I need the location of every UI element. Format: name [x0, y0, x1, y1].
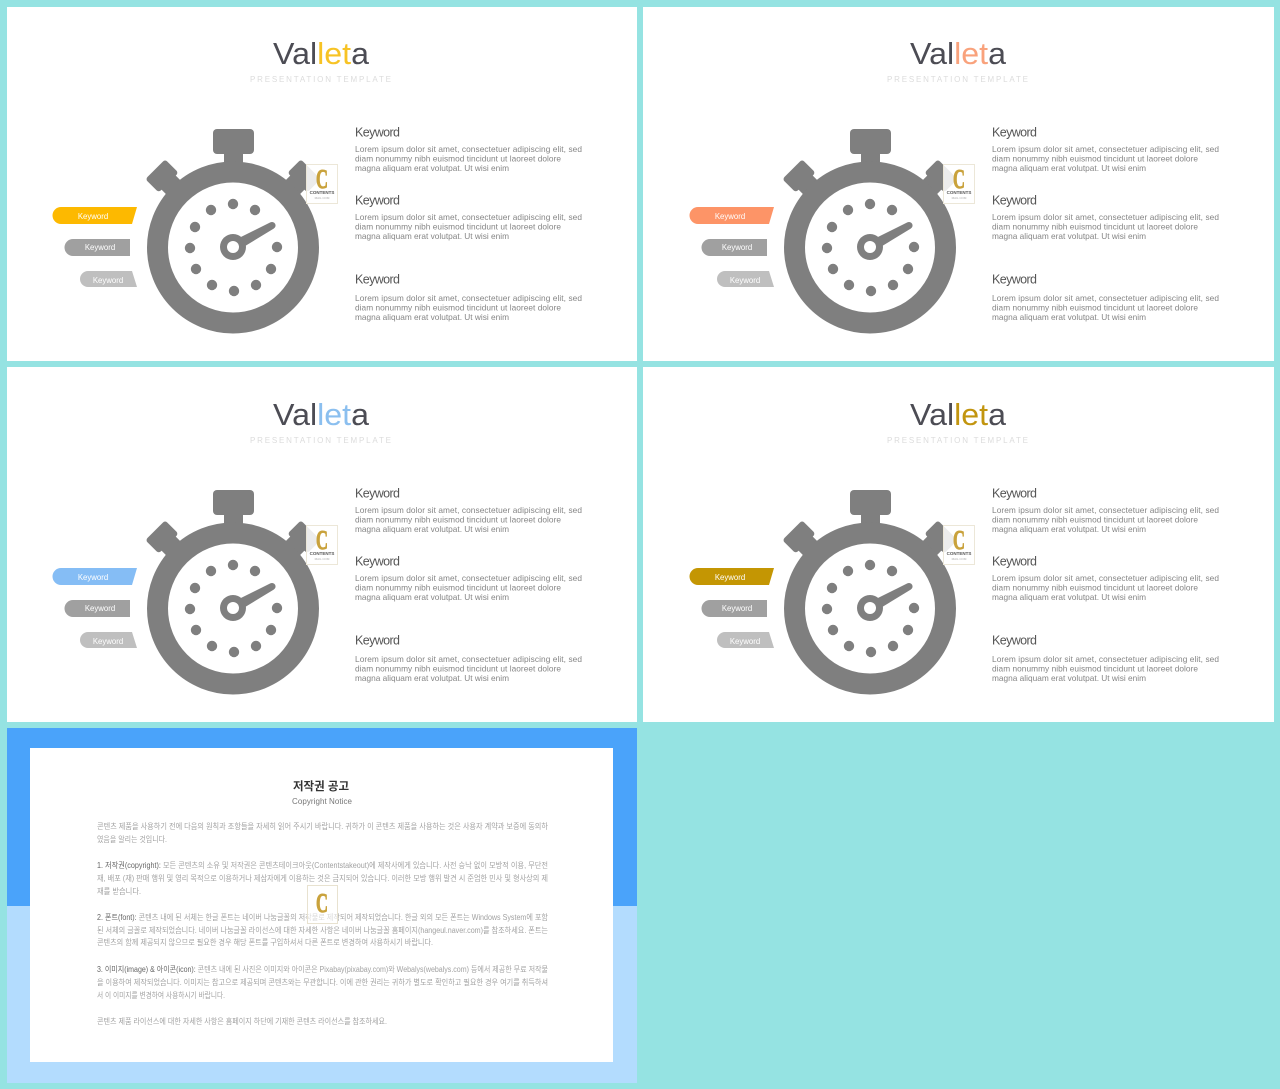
text block 1: magna aliquam erat volutpat. Ut wisi enim — [355, 163, 509, 173]
text block 2: diam nonummy nibh euismod tincidunt ut laoreet dolore — [355, 582, 561, 592]
section 2: font — [97, 912, 549, 947]
notice subheading: Copyright Notice — [292, 797, 353, 806]
tag: active keyword — [690, 568, 774, 585]
tag: second keyword — [64, 239, 130, 256]
watermark logo — [306, 164, 338, 204]
tag: third keyword: Keyword — [730, 637, 760, 646]
tag: third keyword — [717, 632, 774, 648]
watermark logo: C — [953, 525, 965, 555]
text block 3: magna aliquam erat volutpat. Ut wisi enim — [992, 673, 1146, 683]
text block 2: diam nonummy nibh euismod tincidunt ut laoreet dolore — [355, 222, 561, 232]
text block 3: diam nonummy nibh euismod tincidunt ut laoreet dolore — [992, 664, 1198, 674]
text block 1: Keyword — [992, 486, 1037, 500]
text block 1 — [355, 126, 582, 173]
icon: stopwatch — [782, 490, 958, 684]
text block 2: Keyword — [355, 554, 400, 568]
watermark logo — [306, 525, 338, 564]
intro paragraph: 콘텐츠 제품을 사용하기 전에 다음의 원칙과 조항들을 자세히 읽어 주시기 바랍니다. 귀하가 이 콘텐츠 제품을 사용하는 것은 사용자 계약과 보증에 동의하 — [97, 821, 549, 831]
text block 1: Lorem ipsum dolor sit amet, consectetuer adipiscing elit, sed — [992, 144, 1219, 154]
notice heading: 저작권 공고 — [293, 779, 349, 793]
text block 2: Lorem ipsum dolor sit amet, consectetuer adipiscing elit, sed — [355, 573, 582, 583]
section 3: image and icon — [97, 964, 548, 1000]
tag: third keyword: Keyword — [93, 637, 123, 646]
text block 3 — [992, 634, 1219, 683]
watermark logo: MAIL COM — [952, 557, 967, 561]
text block 2: magna aliquam erat volutpat. Ut wisi enim — [355, 231, 509, 241]
text block 1: Lorem ipsum dolor sit amet, consectetuer adipiscing elit, sed — [355, 505, 582, 515]
tag: second keyword: Keyword — [85, 243, 115, 252]
section 1: copyright — [97, 860, 548, 896]
title: Valleta — [273, 397, 370, 432]
text block 2: Keyword — [992, 194, 1037, 208]
panel: orange slide — [643, 7, 1274, 361]
text block 1: Keyword — [992, 126, 1037, 140]
tag: second keyword — [702, 600, 767, 617]
text block 2: diam nonummy nibh euismod tincidunt ut laoreet dolore — [992, 582, 1198, 592]
section 1: copyright: 1. 저작권(copyright): 모든 콘텐츠의 소유 및 저작권은 콘텐츠테이크아웃(Contentstakeout)에 제작사에게 있습니다. 사전 승낙 없이 모방적 이용, 무단전 — [97, 860, 548, 870]
text block 3: diam nonummy nibh euismod tincidunt ut laoreet dolore — [355, 302, 561, 312]
blue upper background — [7, 728, 637, 906]
text block 3: Keyword — [992, 272, 1037, 286]
text block 3: Lorem ipsum dolor sit amet, consectetuer adipiscing elit, sed — [992, 654, 1219, 664]
text block 1 — [992, 486, 1219, 534]
text block 3: magna aliquam erat volutpat. Ut wisi enim — [992, 312, 1146, 322]
panel: copyright notice — [7, 728, 637, 1083]
watermark logo: C — [316, 525, 328, 555]
watermark logo — [308, 886, 338, 924]
text block 2: Lorem ipsum dolor sit amet, consectetuer adipiscing elit, sed — [992, 212, 1219, 222]
watermark logo — [944, 164, 974, 204]
watermark logo: MAIL COM — [952, 196, 967, 200]
text block 2 — [355, 194, 582, 241]
text block 1 — [355, 486, 582, 534]
text block 3 — [992, 272, 1219, 322]
section 3: image and icon: 을 이용하여 제작되었습니다. 이미지는 참고으로 제공되며 콘텐츠와는 무관합니다. 이에 관한 권리는 귀하가 별도로 확인하고 필요한 경우 여기를 취득하셔 — [97, 977, 548, 987]
tag: second keyword: Keyword — [722, 604, 752, 613]
text block 2: Keyword — [992, 554, 1037, 568]
watermark logo — [944, 525, 974, 564]
slide background — [643, 367, 1274, 722]
tag: third keyword: Keyword — [730, 276, 760, 285]
text block 2: Lorem ipsum dolor sit amet, consectetuer adipiscing elit, sed — [355, 212, 582, 222]
slide background — [7, 367, 637, 722]
section 2: font: 된 서체의 글꼴로 제작되었습니다. 네이버 나눔글꼴 라이선스에 대한 자세한 사항은 네이버 나눔글꼴 홈페이지(hangeul.naver.com)를 참조하세요. 폰트는 — [97, 925, 548, 935]
text block 3: Lorem ipsum dolor sit amet, consectetuer adipiscing elit, sed — [355, 293, 582, 303]
text block 3: Keyword — [355, 272, 400, 286]
subtitle: PRESENTATION TEMPLATE — [887, 75, 1028, 84]
intro paragraph — [97, 821, 549, 844]
white notice card — [30, 748, 613, 1062]
title: Valleta — [910, 36, 1007, 71]
text block 2: magna aliquam erat volutpat. Ut wisi enim — [992, 231, 1146, 241]
tag: active keyword: Keyword — [715, 573, 745, 582]
tag: active keyword — [690, 207, 774, 224]
text block 3 — [355, 272, 582, 322]
watermark logo: MAIL COM — [315, 196, 330, 200]
watermark logo: C — [953, 164, 965, 194]
text block 3: Keyword — [992, 634, 1037, 648]
tag: active keyword: Keyword — [78, 212, 108, 221]
text block 1: Keyword — [355, 126, 400, 140]
title: Valleta — [273, 36, 370, 71]
text block 3: diam nonummy nibh euismod tincidunt ut laoreet dolore — [992, 302, 1198, 312]
text block 2: Lorem ipsum dolor sit amet, consectetuer adipiscing elit, sed — [992, 573, 1219, 583]
panel: yellow slide — [7, 7, 637, 361]
icon: stopwatch — [145, 490, 321, 684]
text block 2: magna aliquam erat volutpat. Ut wisi enim — [992, 592, 1146, 602]
slide background — [7, 7, 637, 361]
section 2: font: 콘텐츠의 함께 제공되지 않으므로 필요한 경우 해당 폰트를 구입하셔서 다른 폰트로 변경하여 사용하시기 바랍니다. — [97, 937, 433, 947]
text block 3: Lorem ipsum dolor sit amet, consectetuer adipiscing elit, sed — [355, 654, 582, 664]
text block 2 — [355, 554, 582, 602]
tag: second keyword: Keyword — [722, 243, 752, 252]
tag: third keyword: Keyword — [93, 276, 123, 285]
subtitle: PRESENTATION TEMPLATE — [250, 436, 391, 445]
text block 1: diam nonummy nibh euismod tincidunt ut laoreet dolore — [992, 154, 1198, 164]
slide background — [643, 7, 1274, 361]
closing line: 콘텐츠 제품 라이선스에 대한 자세한 사항은 홈페이지 하단에 기재한 콘텐츠 라이선스를 참조하세요. — [97, 1016, 387, 1026]
section 1: copyright: 재를 받습니다. — [97, 886, 141, 896]
tag: third keyword — [80, 271, 137, 287]
text block 1: Lorem ipsum dolor sit amet, consectetuer adipiscing elit, sed — [355, 144, 582, 154]
text block 1: diam nonummy nibh euismod tincidunt ut laoreet dolore — [355, 154, 561, 164]
text block 3: magna aliquam erat volutpat. Ut wisi enim — [355, 312, 509, 322]
subtitle: PRESENTATION TEMPLATE — [250, 75, 391, 84]
text block 3: Lorem ipsum dolor sit amet, consectetuer adipiscing elit, sed — [992, 293, 1219, 303]
subtitle: PRESENTATION TEMPLATE — [887, 436, 1028, 445]
section 3: image and icon: 서 이 이미지를 변경하여 사용하시기 바랍니다. — [97, 990, 225, 1000]
tag: third keyword — [717, 271, 774, 287]
section 1: copyright: 재, 배포 (재) 판매 행위 및 영리 목적으로 이용하거나 제삼자에게 이용하는 것은 금지되어 있습니다. 이러한 모방 행위 발견 시 준엄한 민사 및 형사상의 제 — [97, 873, 548, 883]
watermark logo: CONTENTS — [310, 190, 334, 195]
text block 3: diam nonummy nibh euismod tincidunt ut laoreet dolore — [355, 664, 561, 674]
text block 1: Keyword — [355, 486, 400, 500]
section 3: image and icon: 3. 이미지(image) & 아이콘(icon): 콘텐츠 내에 된 사진은 이미지와 아이콘은 Pixabay(pixabay.com)와 Webalys(webalys.com) 등에서 제공한 무료 저작물 — [97, 964, 548, 974]
text block 1 — [992, 126, 1219, 173]
tag: second keyword — [702, 239, 767, 256]
panel: gold slide — [643, 367, 1274, 722]
text block 1: Lorem ipsum dolor sit amet, consectetuer adipiscing elit, sed — [992, 505, 1219, 515]
title: Valleta — [910, 397, 1007, 432]
text block 1: diam nonummy nibh euismod tincidunt ut laoreet dolore — [355, 514, 561, 524]
tag: active keyword — [52, 207, 137, 224]
text block 2: magna aliquam erat volutpat. Ut wisi enim — [355, 592, 509, 602]
text block 2 — [992, 554, 1219, 602]
text block 2: Keyword — [355, 194, 400, 208]
section 2: font: 2. 폰트(font): 콘텐츠 내에 된 서체는 한글 폰트는 네이버 나눔글꼴의 저작물로 제작되어 제작되었습니다. 한글 외의 모든 폰트는 Windows System에 포함 — [97, 912, 549, 922]
watermark logo: C — [316, 888, 328, 918]
panel: blue slide — [7, 367, 637, 722]
text block 3: Keyword — [355, 634, 400, 648]
text block 1: magna aliquam erat volutpat. Ut wisi enim — [992, 524, 1146, 534]
light blue lower background — [7, 906, 637, 1083]
tag: third keyword — [80, 632, 137, 648]
text block 1: magna aliquam erat volutpat. Ut wisi enim — [355, 524, 509, 534]
watermark logo: CONTENTS — [310, 551, 334, 556]
watermark logo: CONTENTS — [947, 190, 971, 195]
text block 2 — [992, 194, 1219, 241]
watermark logo: CONTENTS — [947, 551, 971, 556]
tag: second keyword: Keyword — [85, 604, 115, 613]
tag: second keyword — [64, 600, 130, 617]
text block 1: diam nonummy nibh euismod tincidunt ut laoreet dolore — [992, 514, 1198, 524]
text block 3 — [355, 634, 582, 683]
text block 2: diam nonummy nibh euismod tincidunt ut laoreet dolore — [992, 222, 1198, 232]
text block 1: magna aliquam erat volutpat. Ut wisi enim — [992, 163, 1146, 173]
icon: stopwatch — [782, 129, 958, 323]
watermark logo: MAIL COM — [315, 557, 330, 561]
tag: active keyword — [52, 568, 137, 585]
watermark logo: C — [316, 164, 328, 194]
tag: active keyword: Keyword — [78, 573, 108, 582]
icon: stopwatch — [145, 129, 321, 323]
intro paragraph: 였음을 알리는 것입니다. — [97, 834, 167, 844]
tag: active keyword: Keyword — [715, 212, 745, 221]
text block 3: magna aliquam erat volutpat. Ut wisi enim — [355, 673, 509, 683]
